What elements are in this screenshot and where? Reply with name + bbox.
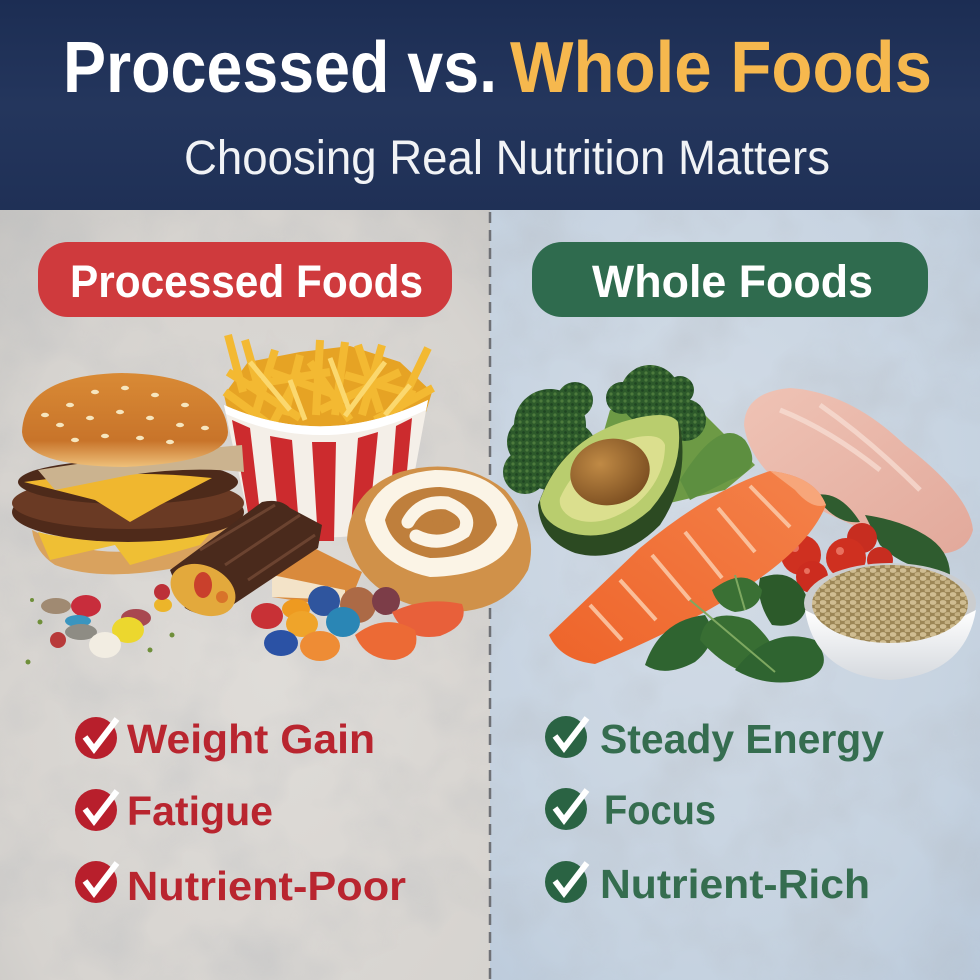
heading pill: whole foods: Whole Foods bbox=[592, 256, 873, 307]
illustration: caramel snack piece bbox=[272, 546, 362, 603]
illustration: salmon fillet bbox=[549, 471, 826, 664]
illustration: bowl of lentils bbox=[804, 563, 976, 680]
benefit list: processed foods bbox=[75, 716, 406, 909]
illustration: raw chicken breast bbox=[744, 388, 973, 554]
subtitle: Choosing Real Nutrition Matters bbox=[184, 132, 830, 185]
item: fatigue: Fatigue bbox=[127, 788, 273, 834]
illustration: french fries in striped cup bbox=[224, 335, 433, 541]
heading pill: whole foods bbox=[532, 242, 928, 317]
item: focus: Focus bbox=[604, 787, 716, 833]
item: weight gain: Weight Gain bbox=[127, 716, 375, 762]
illustration: avocado half bbox=[538, 415, 682, 556]
title bbox=[63, 28, 932, 108]
illustration: cheeseburger bbox=[12, 373, 244, 574]
panel: processed foods background bbox=[0, 210, 490, 980]
mottled texture overlay bbox=[0, 210, 980, 980]
centre dashed divider bbox=[489, 212, 491, 980]
item: steady energy: Steady Energy bbox=[600, 716, 884, 762]
item: focus bbox=[545, 787, 716, 833]
illustration: candies and gummies bbox=[26, 584, 464, 664]
title: Processed vs. bbox=[63, 28, 497, 108]
illustration: herbs and cherry tomatoes bbox=[781, 494, 950, 593]
illustration: broccoli bbox=[503, 365, 755, 510]
illustration: chocolate bar bbox=[162, 501, 322, 626]
item: nutrient-rich: Nutrient-Rich bbox=[600, 861, 870, 907]
panel: whole foods background bbox=[490, 210, 980, 980]
illustration: spinach leaves bbox=[645, 574, 824, 682]
title: Whole Foods bbox=[510, 28, 932, 108]
heading pill: processed foods: Processed Foods bbox=[70, 256, 423, 307]
benefit list: whole foods bbox=[545, 716, 884, 907]
illustration: cinnamon roll bbox=[347, 466, 531, 612]
item: nutrient-poor: Nutrient-Poor bbox=[127, 863, 406, 909]
heading pill: processed foods bbox=[38, 242, 452, 317]
header banner bbox=[0, 0, 980, 210]
